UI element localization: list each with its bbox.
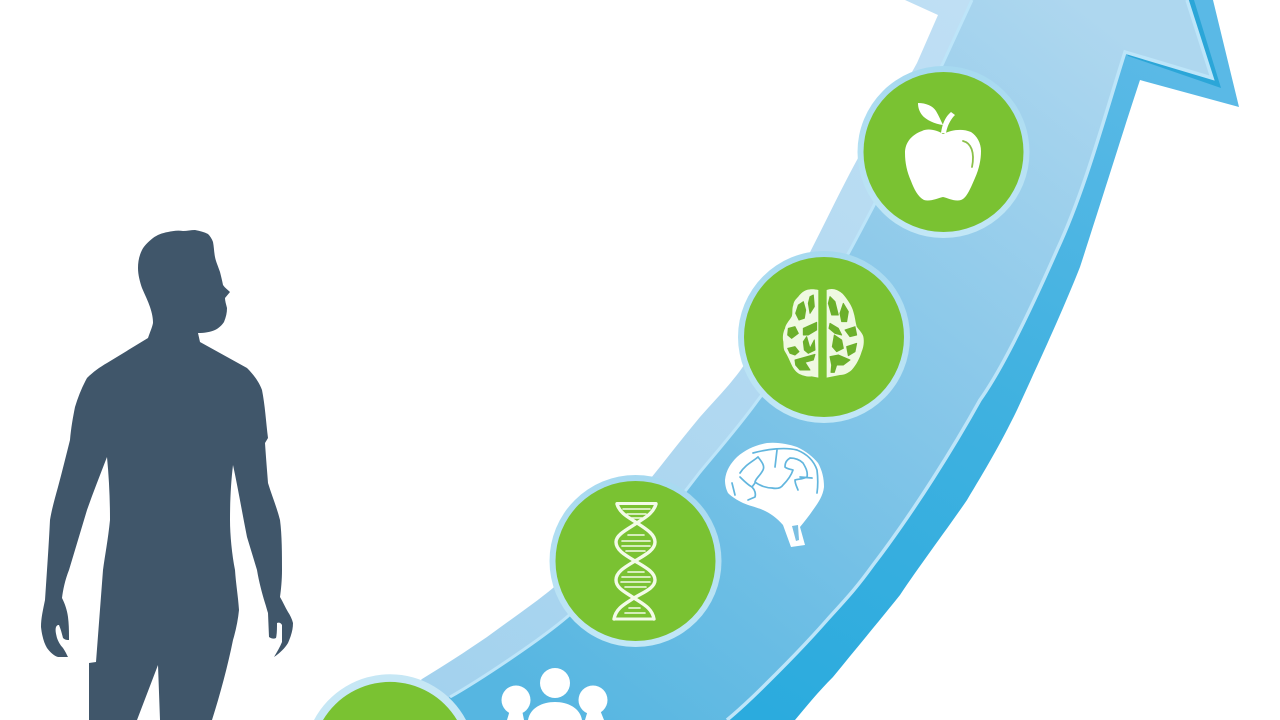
arrow dark outer band [727, 0, 1239, 720]
step circle: apple [858, 66, 1030, 238]
step circle: brain [738, 251, 910, 423]
icon: apple [905, 103, 981, 201]
icon: DNA helix [614, 504, 656, 619]
growth arrow [400, 0, 1239, 720]
arrow right highlight [727, 0, 1212, 720]
arrow left highlight [450, 0, 972, 697]
person silhouette [41, 230, 293, 720]
step circle: partial bottom [314, 674, 466, 720]
arrow head deep stripe [1125, 0, 1221, 88]
icon: top view brain [783, 289, 864, 378]
icon: white side brain [725, 443, 824, 547]
arrow main body [415, 0, 1212, 720]
arrow rear band [400, 0, 1000, 720]
icon: people group [502, 668, 608, 720]
step circle: DNA [550, 475, 722, 647]
